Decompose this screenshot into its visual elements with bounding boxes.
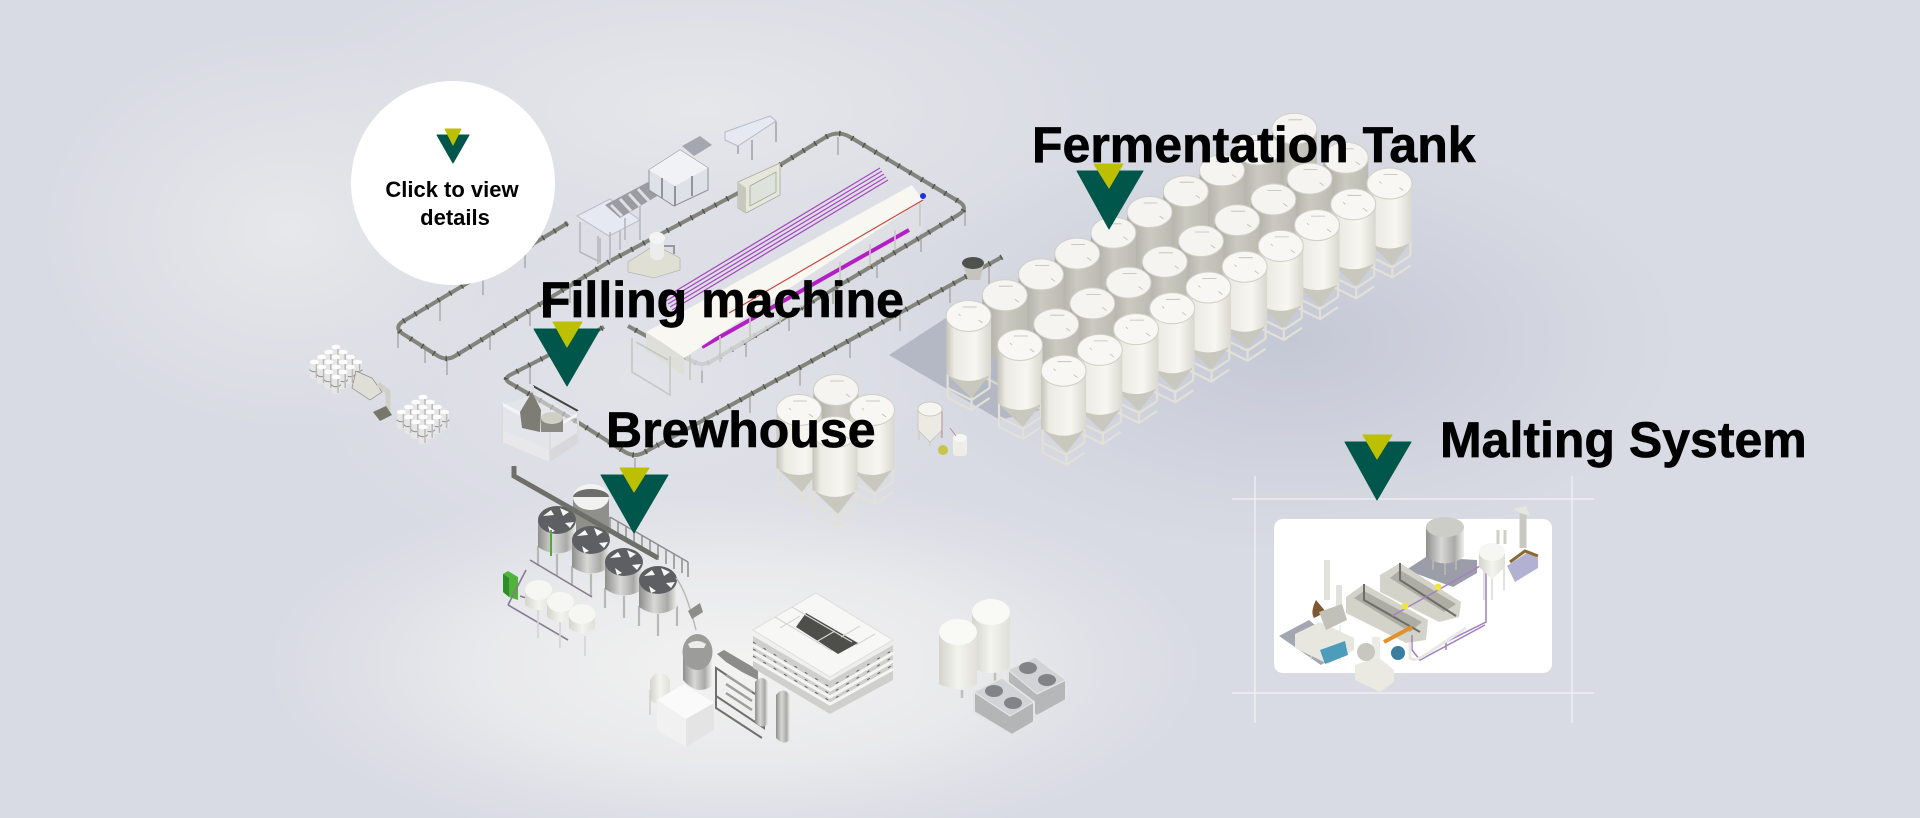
label: Fermentation Tank: Fermentation Tank (1032, 117, 1476, 173)
bottle stack right (397, 395, 449, 444)
shadow under fermentation tanks (889, 312, 1080, 420)
click to view details callout: details (420, 205, 490, 230)
brewhouse auger (514, 466, 658, 558)
click to view details callout (351, 81, 555, 285)
filling machine enclosure (502, 386, 578, 462)
bottle washing line (577, 116, 776, 264)
control cabinet (738, 163, 780, 213)
brewhouse silo (573, 484, 609, 535)
label: Malting System: Malting System (1440, 412, 1807, 468)
chilled water tanks (939, 599, 1010, 698)
label: Filling machine: Filling machine (540, 272, 904, 328)
click to view details callout: Click to view (385, 177, 520, 202)
small electric drive (688, 603, 703, 619)
marker: filling machine (534, 322, 600, 386)
small process machine (628, 232, 680, 278)
bottle stack left (310, 345, 362, 394)
small white tank and white box (650, 672, 714, 747)
membrane frame and cylinders (716, 650, 790, 743)
four bright storage tanks (776, 374, 894, 526)
small white service tanks with pipes (508, 560, 596, 656)
pressure vessel (682, 634, 712, 690)
palletising machine (352, 371, 392, 421)
brewhouse railing (610, 517, 688, 577)
label: Brewhouse: Brewhouse (606, 402, 876, 458)
brewhouse kettles (538, 506, 696, 636)
conveyor lines (398, 134, 1002, 476)
marker: malting system (1345, 435, 1411, 500)
hopper (962, 257, 984, 280)
callout marker (437, 129, 469, 163)
filter vessel and pump (918, 402, 967, 456)
green control box (503, 571, 518, 600)
fermentation tanks (946, 113, 1412, 465)
marker: fermentation tank (1077, 164, 1143, 229)
marker: brewhouse (601, 468, 668, 533)
malting system panel (1232, 476, 1594, 723)
malting system equipment (1279, 506, 1538, 692)
stacked white pallets (753, 593, 893, 714)
tunnel pasteuriser with pipes (632, 168, 926, 395)
cooling units (974, 657, 1066, 735)
